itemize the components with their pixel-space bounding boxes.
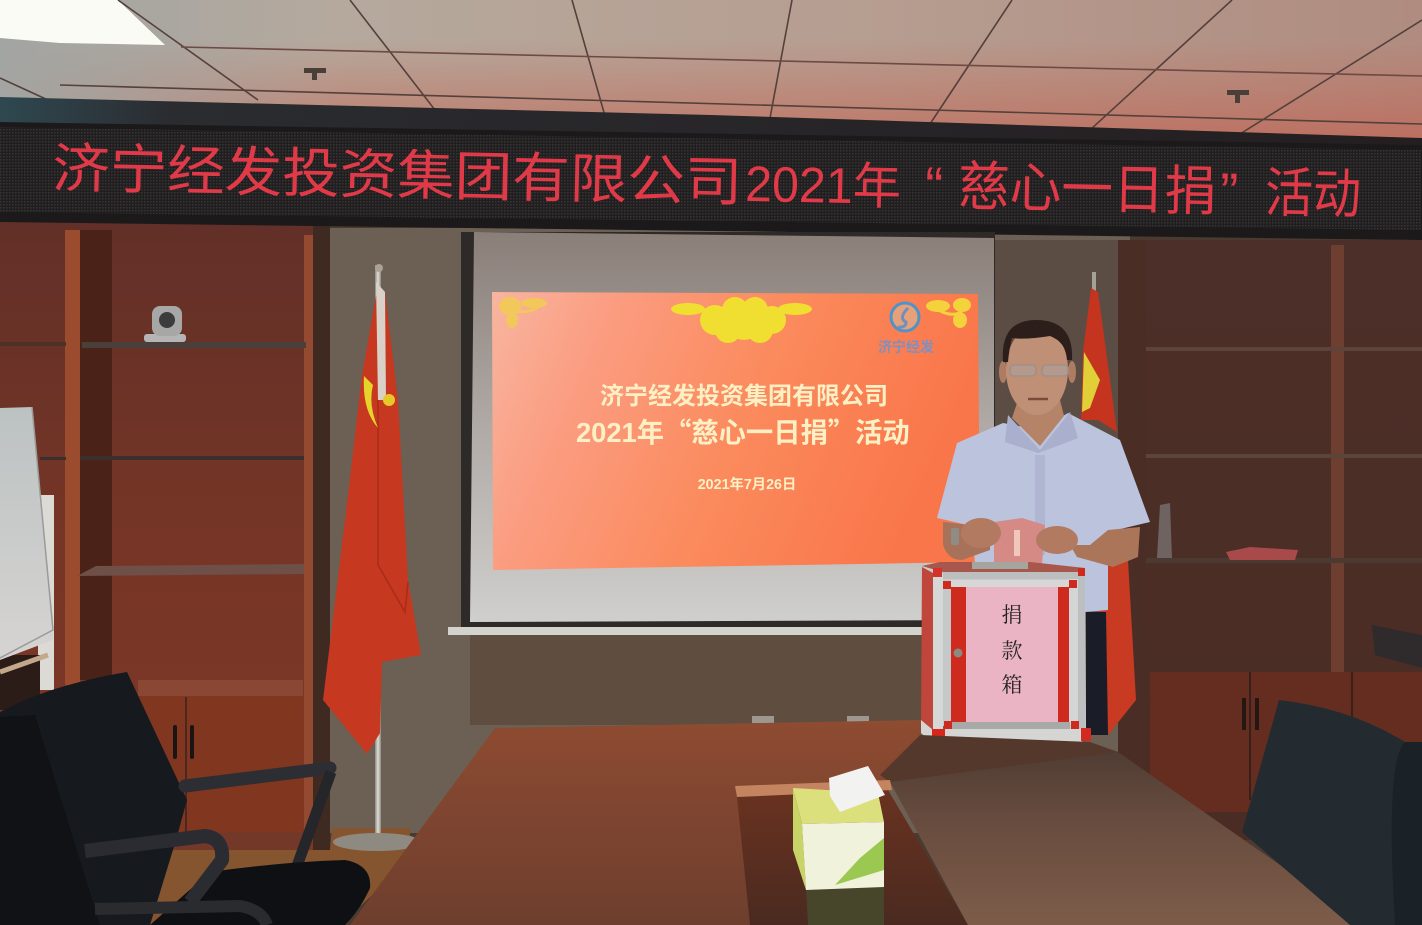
box paper text: 箱 (1002, 669, 1022, 699)
donation box (921, 562, 1091, 744)
table inset tray (737, 790, 968, 925)
items on shelf (1226, 547, 1298, 560)
screen rail (448, 627, 928, 635)
right wooden cabinet (1118, 240, 1422, 840)
soffit (0, 97, 1422, 155)
lower cupboard (138, 680, 303, 696)
LED banner (0, 122, 1422, 240)
slide date: 2021年7月26日 (698, 475, 796, 493)
glasses (1010, 365, 1068, 376)
projected slide (492, 292, 980, 570)
box paper text (1002, 599, 1022, 699)
right flag (1081, 272, 1136, 735)
hands (961, 518, 1001, 548)
slide title: 济宁经发投资集团有限公司 (600, 383, 888, 410)
meeting table (350, 720, 1366, 925)
slide ornament: right corner (926, 298, 971, 328)
LED banner text: 济宁经发投资集团有限公司 (52, 139, 743, 213)
slide ornament: centre peony (671, 297, 812, 343)
box paper label (966, 587, 1058, 722)
slide logo (878, 303, 934, 355)
slide title: 2021年“慈心一日捐”活动 (576, 410, 910, 450)
box base (952, 722, 1070, 730)
tissue box (793, 766, 885, 925)
box paper text: 捐 (1002, 599, 1022, 629)
trousers (1086, 612, 1108, 735)
slide title (576, 383, 910, 493)
box lock (954, 648, 962, 658)
conference camera (144, 306, 186, 342)
box silver frame (922, 567, 1086, 732)
LED banner text: 慈心一日捐 (958, 157, 1217, 222)
projector screen (448, 232, 995, 635)
box red strips (951, 587, 966, 722)
centre wall (330, 228, 1130, 833)
ceiling (0, 0, 1422, 155)
arms (943, 522, 990, 560)
ceiling light (0, 0, 165, 45)
neck and head (1012, 400, 1064, 446)
whiteboard (0, 407, 54, 710)
left office chairs (0, 672, 370, 925)
box paper text: 款 (1002, 635, 1022, 665)
slide logo: 济宁经发 (878, 339, 934, 355)
man (937, 320, 1150, 735)
banknotes (994, 518, 1045, 564)
ceiling fixtures (304, 68, 326, 73)
watch (951, 528, 959, 545)
LED banner text: 2021年 (745, 156, 902, 215)
box clasp (972, 562, 1028, 569)
slide ornament: left corner (499, 297, 547, 328)
left flag (323, 264, 421, 851)
right office chair (1242, 700, 1422, 925)
floor (120, 828, 410, 925)
left wooden cabinet (0, 222, 330, 852)
LED banner text: ” (1219, 162, 1239, 223)
shirt (937, 413, 1150, 612)
LED banner text (52, 139, 1362, 225)
LED banner text: 活动 (1264, 163, 1362, 225)
LED banner text: “ (925, 157, 944, 217)
